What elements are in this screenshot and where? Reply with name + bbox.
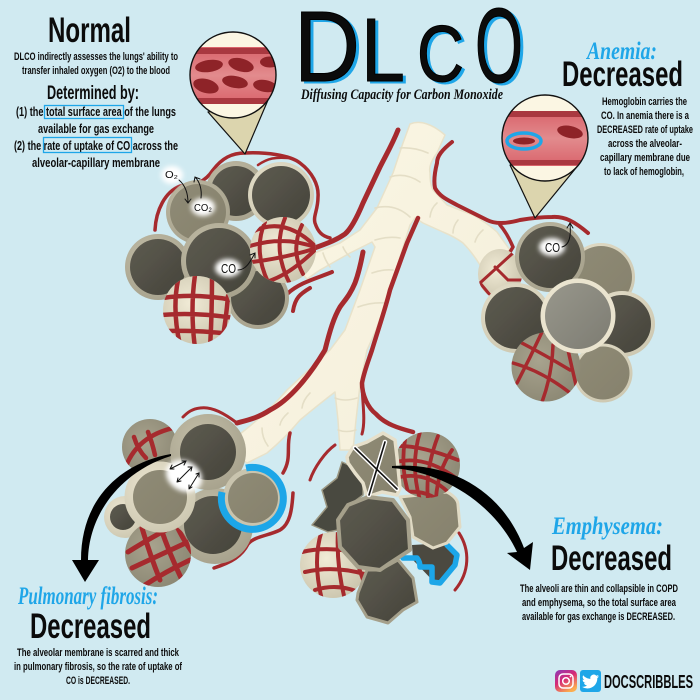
gas label: O2: O₂ <box>165 170 178 181</box>
icon: instagram <box>555 670 577 692</box>
gas label: O2 <box>161 166 191 203</box>
illustration: pulmonary vessels <box>155 130 588 590</box>
text: DLCO description: transfer inhaled oxygen (O2) to the blood <box>22 65 170 77</box>
text: determinants <box>14 104 178 170</box>
text: fibrosis description: CO is DECREASED. <box>66 675 130 687</box>
panel: anemia <box>562 38 693 178</box>
arrow: to emphysema <box>392 466 533 570</box>
magnified capillary: anemia <box>497 95 593 218</box>
title <box>294 0 523 105</box>
highlight: total surface area <box>44 106 124 118</box>
gas label: CO in anemia alveolus: CO <box>545 240 560 255</box>
text: fibrosis description <box>14 647 182 687</box>
text: determinants: alveolar-capillary membrane <box>32 155 160 170</box>
text: determinants: available for gas exchange <box>38 121 154 136</box>
gas label: CO in normal alveolus <box>215 253 255 277</box>
panel: normal <box>14 11 178 170</box>
result: decreased: Decreased <box>30 607 151 646</box>
heading: emphysema: Emphysema: <box>551 513 663 540</box>
panel: pulmonary fibrosis <box>14 583 182 687</box>
title: L <box>361 1 405 101</box>
text: anemia description <box>597 96 693 178</box>
title: C <box>417 9 464 98</box>
text: determinants: (2) the rate of uptake of CO across the <box>14 138 178 153</box>
gas label: CO2 <box>191 177 215 216</box>
text: fibrosis description: The alveolar membrane is scarred and thick <box>17 647 180 659</box>
subtitle: Diffusing Capacity for Carbon Monoxide <box>300 87 503 103</box>
illustration: anemia alveoli cluster <box>478 222 655 402</box>
X mark over alveolus <box>355 442 397 495</box>
gas label: CO in normal alveolus: CO <box>221 261 236 276</box>
gas label: CO2: CO₂ <box>194 202 212 214</box>
illustration: fibrosis alveoli cluster <box>104 414 283 587</box>
arrow: to pulmonary fibrosis <box>72 454 171 582</box>
text: DLCO description: DLCO indirectly assesses the lungs' ability to <box>14 51 178 63</box>
text: determinants: (1) the total surface area of the lungs <box>16 104 176 119</box>
illustration: bronchial tree <box>235 122 510 463</box>
diffusion arrows across thickened membrane <box>160 454 208 498</box>
magnified capillary: normal <box>185 32 281 154</box>
heading: anemia: Anemia: <box>585 38 657 65</box>
gas label: CO in anemia alveolus <box>539 223 573 256</box>
text: fibrosis description: in pulmonary fibrosis, so the rate of uptake of <box>14 661 182 673</box>
illustration: emphysema alveoli cluster <box>300 432 460 623</box>
heading: determined by: Determined by: <box>47 82 139 104</box>
heading: pulmonary fibrosis: Pulmonary fibrosis: <box>17 583 158 610</box>
highlight: rate of uptake of CO <box>44 138 132 152</box>
text: emphysema description <box>520 583 678 623</box>
icon: twitter <box>580 670 601 692</box>
text: DLCO description <box>14 51 178 77</box>
panel: emphysema <box>520 513 678 623</box>
heading: normal: Normal <box>48 11 131 50</box>
illustration: normal alveoli cluster <box>125 161 317 348</box>
